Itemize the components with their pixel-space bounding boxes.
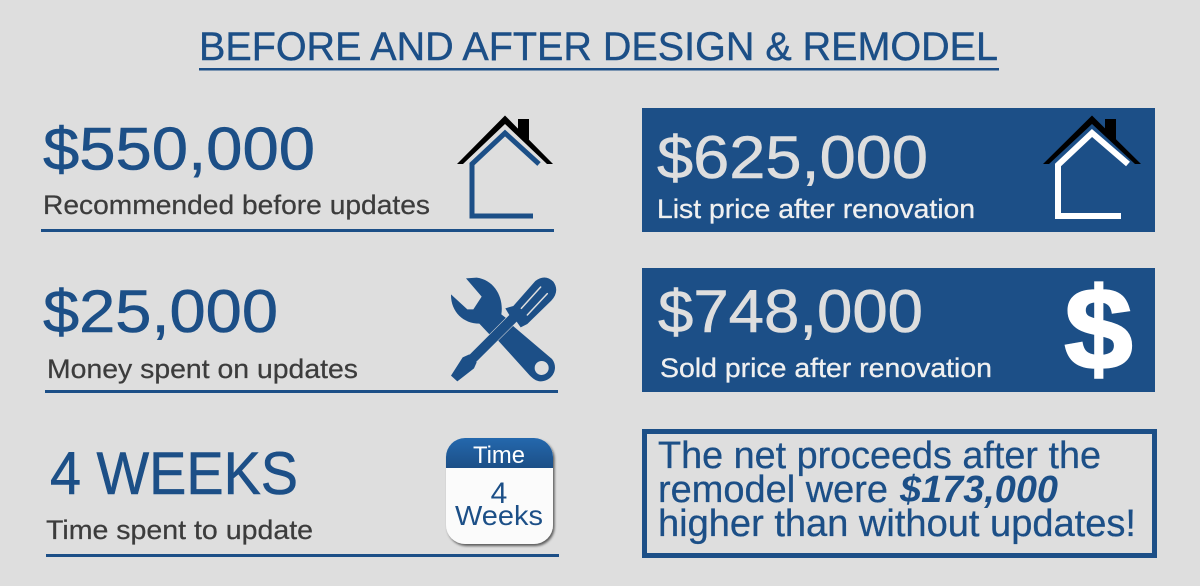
icon: calendar: 4 [491,477,507,510]
caption: money spent on updates: Money spent on updates [47,354,358,384]
panel: list price after renovation [642,108,1155,232]
caption: time spent to update: Time spent to update [46,515,313,545]
callout: net proceeds: higher than without updates! [658,503,1136,545]
icon: calendar [446,438,553,544]
callout: net proceeds: remodel were [658,469,888,511]
caption: recommended before updates: Recommended before updates [43,190,430,220]
stat: time spent to update [46,438,559,557]
caption: sold price after renovation: Sold price after renovation [660,353,992,383]
icon: wrench and screwdriver [451,277,556,381]
icon: house [457,116,553,216]
callout: net proceeds: The net proceeds after the [658,435,1101,477]
caption: list price after renovation: List price after renovation [657,194,975,224]
callout: net proceeds [644,432,1154,556]
icon: calendar: Time [473,442,525,469]
stat: money spent on updates [43,277,558,393]
callout: net proceeds: $173,000 [899,469,1058,511]
value: 4 weeks: 4 WEEKS [50,440,298,507]
value: $748,000: $748,000 [658,278,923,345]
panel: sold price after renovation [642,264,1155,394]
icon: dollar sign: $ [1064,264,1132,394]
value: $25,000: $25,000 [43,278,278,345]
stat: recommended price before updates [41,116,554,232]
value: $625,000: $625,000 [657,124,928,191]
icon: calendar: Weeks [455,500,543,531]
value: $550,000: $550,000 [43,116,315,182]
icon: house [1043,116,1141,216]
title: BEFORE AND AFTER DESIGN & REMODEL [199,25,998,69]
